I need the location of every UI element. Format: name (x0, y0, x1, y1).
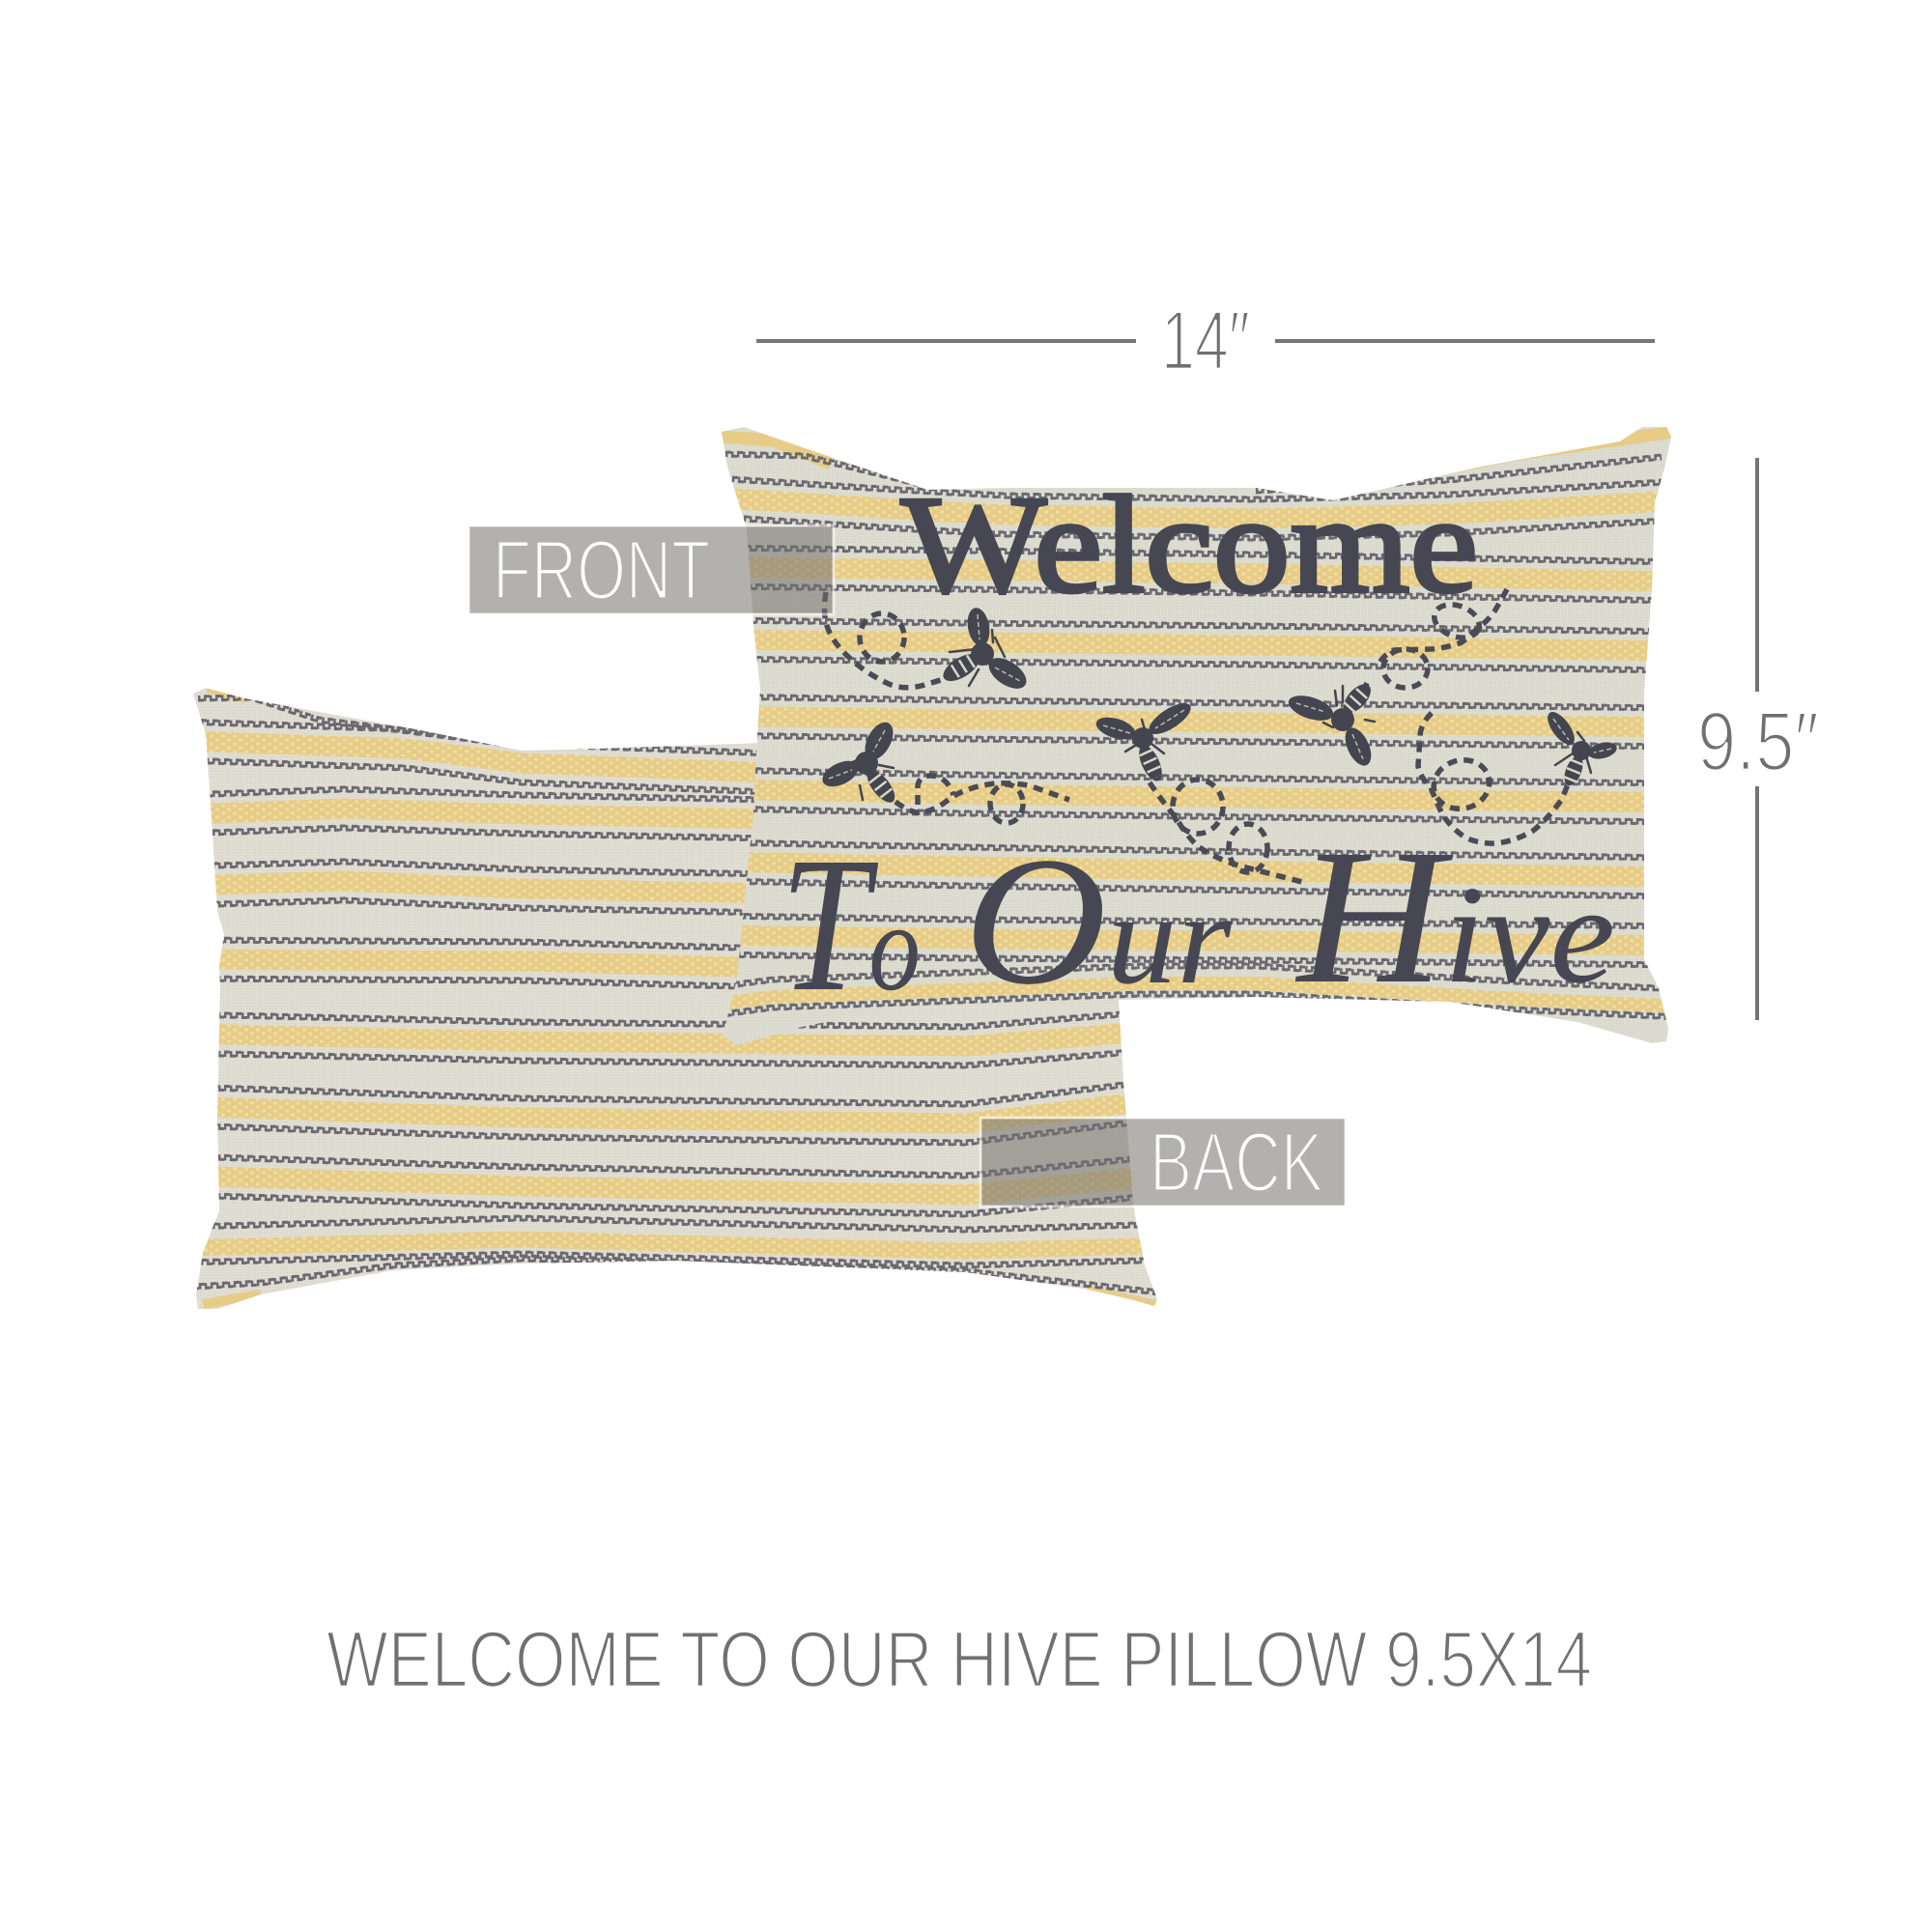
label: BACK: BACK (1150, 1116, 1323, 1209)
dimension: height 9.5 inches (1697, 458, 1819, 1020)
printed text: Our: Our (964, 820, 1232, 1023)
icon: bee 1 (939, 606, 1032, 695)
pillow: back view (184, 676, 1169, 1323)
dimension: height 9.5 inches: 9.5″ (1697, 696, 1819, 788)
pillow: front view (715, 420, 1681, 1053)
dimension: width 14 inches (756, 295, 1655, 387)
icon: bee 4 (1286, 679, 1377, 770)
label: FRONT: FRONT (493, 524, 710, 617)
printed text: To: To (781, 818, 921, 1032)
printed text: Hive: Hive (1294, 810, 1615, 1024)
icon: bee 2 (818, 718, 899, 807)
icon: bee 5 (1543, 708, 1618, 788)
icon: bee 3 (1094, 697, 1195, 784)
label: BACK (980, 1116, 1346, 1209)
dimension: width 14 inches: 14″ (1161, 295, 1250, 387)
title caption: WELCOME TO OUR HIVE PILLOW 9.5X14 (327, 1614, 1592, 1704)
bee flight trails (825, 589, 1570, 882)
printed text: Welcome: Welcome (901, 469, 1478, 622)
